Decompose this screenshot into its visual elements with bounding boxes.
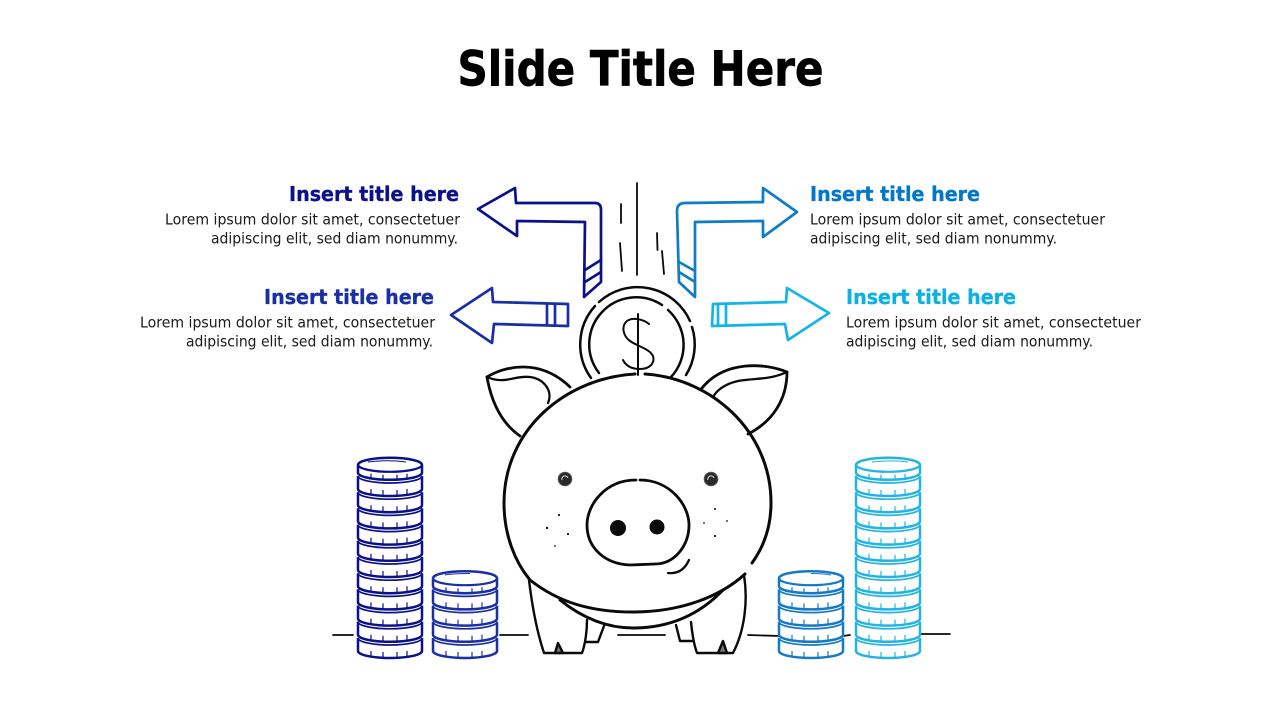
text block: lower right: adipiscing elit, sed diam nonummy. — [846, 332, 1093, 350]
text block: top left — [165, 182, 461, 248]
text block: top right: adipiscing elit, sed diam nonummy. — [810, 230, 1057, 248]
text block: top right — [810, 182, 1106, 248]
snout — [587, 480, 689, 573]
icon: dollar coin — [580, 287, 695, 378]
arrow: top left — [478, 188, 601, 297]
right ear — [702, 366, 787, 434]
coin stack: short mid blue — [779, 571, 843, 658]
text block: top left: Lorem ipsum dolor sit amet, consectetuer — [165, 210, 461, 228]
icon: piggy bank — [487, 366, 787, 653]
body — [504, 374, 771, 628]
nostrils — [610, 520, 664, 536]
text block: top right: Lorem ipsum dolor sit amet, consectetuer — [810, 210, 1106, 228]
text block: lower left: adipiscing elit, sed diam nonummy. — [186, 332, 433, 350]
text block: lower left: Lorem ipsum dolor sit amet, consectetuer — [140, 314, 436, 332]
text block: top left: adipiscing elit, sed diam nonummy. — [211, 230, 458, 248]
freckles — [546, 508, 728, 547]
text block: lower right — [846, 285, 1142, 350]
eyes — [558, 472, 718, 486]
ground line — [333, 634, 950, 636]
left ear — [487, 367, 570, 436]
falling motion lines — [620, 183, 664, 275]
text block: lower right: Insert title here — [846, 285, 1016, 309]
arrow: lower left — [451, 288, 568, 343]
coin stack: tall navy — [358, 458, 422, 658]
text block: lower left: Insert title here — [264, 285, 434, 309]
legs — [529, 575, 746, 653]
coin stack: tall cyan — [856, 458, 920, 658]
coin stack: short blue — [433, 571, 497, 658]
text block: lower left — [140, 285, 436, 350]
text block: top right: Insert title here — [810, 182, 980, 206]
text block: top left: Insert title here — [289, 182, 459, 206]
title: Slide Title Here — [458, 42, 824, 98]
arrow: lower right — [712, 288, 829, 340]
arrow: top right — [677, 188, 797, 297]
text block: lower right: Lorem ipsum dolor sit amet, consectetuer — [846, 314, 1142, 332]
